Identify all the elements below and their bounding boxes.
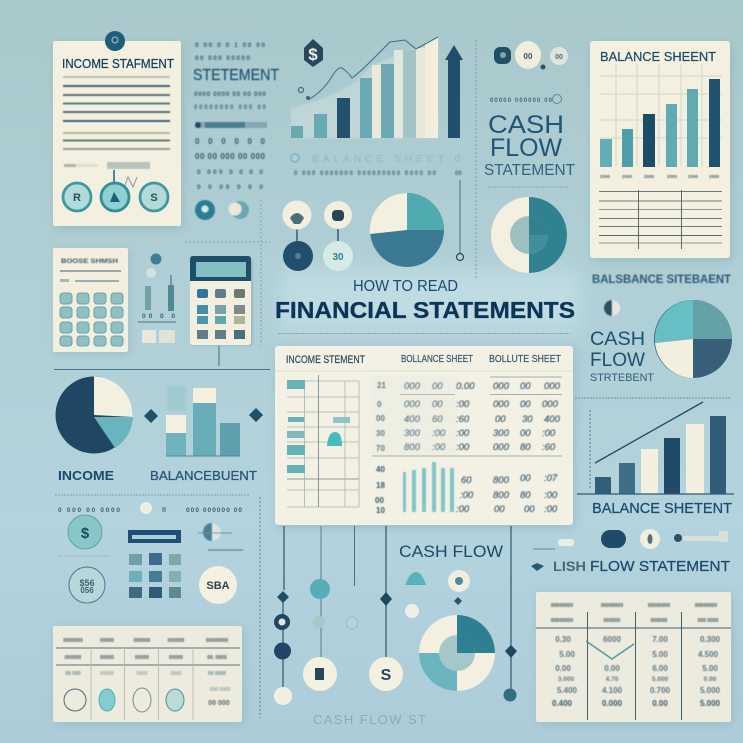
divider: dotted lines left [54,200,270,370]
numbers grid: :07 [544,473,558,484]
heading: cash flow statement lower [531,558,730,575]
labels: income and balance: INCOME [58,468,114,483]
numbers grid: 00 [432,399,443,410]
title [275,278,575,323]
table text: 00000 [100,638,114,644]
table text: 00. 0000 [207,655,227,661]
heading: cash flow statement: 00000 000000 00 [490,98,553,104]
table text: 00 000 [65,671,81,677]
icons: top cash flow badges: 00 [555,54,563,61]
panel: bottom right table: 00000000 [648,603,670,609]
table text: 00000 [169,655,183,661]
bar labels: 2000 [667,174,678,179]
icon: dollar sign: $ [308,45,318,64]
bars [600,79,720,167]
table text: 000000 [65,655,82,661]
heading: cash flow statement right [590,328,654,384]
numbers grid: :00 [432,442,446,453]
icon: gauge blur [198,523,243,550]
numbers grid: 30 [522,414,533,425]
left numbers column: 0 [377,400,382,409]
numbers grid: 00 [520,399,531,410]
icon: SBA badge: SBA [206,580,230,592]
icon: small badge [604,300,620,316]
connector stems with nodes [274,526,517,705]
panel: balance sheet with bars: BALANCE SHEENT [600,50,716,64]
numbers grid: 00 [524,504,535,515]
chart: left pie [56,376,133,454]
icon: SBA badge [199,566,237,604]
icons: connected circle nodes [282,200,353,271]
numbers grid: 400 [404,414,421,425]
arrow up [445,45,463,138]
oval icons [64,688,184,712]
numbers grid: 000 [493,381,510,392]
text: faded balance sheet caption [291,154,462,177]
text: faded balance sheet caption: 00 [455,171,462,177]
chart: right rising bars [575,398,734,494]
small calculator keypad card: BOOSE SHMSH [61,258,118,265]
keypad buttons [60,293,123,346]
heading: cash flow statement right: FLOW [590,349,646,371]
trend line [308,37,438,100]
numbers grid: :00 [542,428,556,439]
table numbers: 6.00 [652,664,668,673]
ledger table [599,190,722,249]
background glow behind title [280,270,580,330]
numbers grid: :00 [544,490,558,501]
text block: statement column: 00 00 000 00 000 [195,152,266,161]
panel: bottom right table: 00000000 [601,603,623,609]
icons: top cash flow badges: 00 [524,52,533,61]
numbers grid: 400 [544,414,561,425]
panel: bottom right table: 000000 [604,618,621,624]
numbers grid: 000 [404,381,421,392]
table text: 00000 [100,655,114,661]
table numbers: 0.000 [602,699,623,708]
heading: cash flow statement right: STRTEBENT [590,372,654,384]
numbers grid: 00 [494,504,505,515]
left numbers column: 18 [376,481,385,490]
numbers grid: 800 [493,490,510,501]
table numbers [552,635,721,708]
table text: 0000000 [63,638,83,644]
bar labels: 2000 [688,174,699,179]
numbers grid: 000 [404,399,421,410]
bar labels: 2000 [600,174,611,179]
divider: dotted vertical upper [475,40,477,278]
table text: 000 0000 [210,687,231,693]
table headers: BOLLUTE SHEET [489,353,561,365]
grid [287,375,359,507]
text block: statement column: 00 000 00000 [195,55,250,62]
bar labels: 2000 [644,174,655,179]
table headers: INCOME STEMENT [286,354,365,366]
table numbers: 0.00 [704,676,717,683]
labels: income and balance [58,468,257,483]
table text: 00000000 [206,638,228,644]
panel: bottom right table: 00000000 [551,618,573,624]
text block: statement column: 00000000 000 00 [194,105,267,111]
numbers grid: 00 [520,473,531,484]
bar labels: 2000 [622,174,633,179]
icon: calculator display and keys [128,530,181,598]
heading: cash flow statement: FLOW [490,134,562,162]
text block: statement column: 0 00 0 0 1 00 00 [195,42,265,49]
table numbers: 0.00 [555,664,571,673]
title: FINANCIAL STATEMENTS [275,297,575,323]
icon: mini bars between cards [138,254,176,343]
table numbers: 5.400 [557,686,578,695]
table numbers: 5.000 [700,699,721,708]
table numbers: 5.000 [700,686,721,695]
icons: small cash flow markers [405,570,470,618]
left numbers column: 10 [376,506,385,515]
table text: 00000 [135,655,149,661]
table numbers: 3.000 [558,676,575,683]
text block: statement column: 0 000 0 0 0 0 [197,169,263,176]
panel: income statement document [53,31,183,229]
numbers grid: 80 [520,442,531,453]
panel: income statement document: INCOME STAFMENT [62,57,174,71]
panel: bottom right table: 00000000 [551,603,573,609]
numbers grid: 000 [493,399,510,410]
icon: three circular badges: S [150,192,158,204]
numbers grid: 00 [432,381,443,392]
table numbers: 0.00 [652,699,668,708]
table rules [372,377,562,456]
table numbers: 4.500 [698,650,719,659]
numbers grid: 000 [493,442,510,453]
text: faded balance sheet caption: 0 000 0000000 000000000 0000 00 [294,171,437,177]
numbers grid: 000 [542,399,559,410]
decorative line with node [456,180,464,260]
numbers grid: :00 [456,428,470,439]
chart: small bar chart [166,386,240,456]
panel: balance sheet with bars [590,41,732,261]
chart: center pie [370,193,444,267]
icon: dollar circle: $ [81,525,90,542]
cluster: payment icons and keypad: 0 000 00 0000 [58,507,120,514]
left numbers column: 70 [376,444,385,453]
left numbers column: 21 [377,381,386,390]
icon: outlined coin: $56 [79,578,95,588]
heading: cash flow statement lower: FLOW STATEMENT [590,558,730,575]
text block: statement column: 0 0 00 0 0 0 [197,184,263,191]
numbers grid: 00 [520,428,531,439]
icon: outlined coin [69,567,105,603]
table numbers: 6000 [603,635,621,644]
numbers grid: 00 [495,414,506,425]
panel: bottom right table: 000000 [651,618,668,624]
icons: connected circle nodes: 30 [332,252,344,263]
icon: dollar sign [304,39,323,67]
heading: cash flow statement lower: LISH [553,558,586,574]
heading: cash flow statement right: CASH [590,328,645,350]
panel: bottom right table: 00000000 [695,603,717,609]
text block: statement column: 0 0 0 0 0 0 [195,137,266,146]
numbers grid: 800 [493,475,510,486]
labels: income and balance: BALANCEBUENT [150,468,257,483]
heading: balance statement caption: BALSBANCE SITEBAENT [592,274,731,286]
heading: cash flow statement: STATEMENT [484,162,576,179]
numbers grid: 300 [404,428,421,439]
numbers grid: 00 [520,381,531,392]
numbers grid: 800 [404,442,421,453]
panel: bottom right table: 000 0000 [698,618,719,624]
left numbers column [375,381,386,515]
numbers grid: :60 [456,414,470,425]
table numbers: 5.00 [559,650,575,659]
text block: statement column [193,42,279,220]
icons: row of controls [533,529,728,549]
chart: rising bars with trend line and arrow [291,37,463,138]
table numbers: 0.00 [604,664,620,673]
left numbers column: 00 [376,414,385,423]
mini bars [403,462,454,512]
left numbers column: 30 [376,429,385,438]
table numbers: 0.300 [700,635,721,644]
table text: 0000 [170,671,182,677]
bar labels [600,174,720,179]
text: faded cash flow footer: CASH FLOW ST [313,712,426,727]
icon: three circular badges [63,183,168,211]
table numbers: 7.00 [652,635,668,644]
heading: cash flow: CASH FLOW [399,542,503,561]
table numbers: 5.00 [652,650,668,659]
text block: statement column: 0000 0000 00 00 000 [194,91,266,98]
numbers grid: 0.00 [456,381,475,392]
cluster: payment icons and keypad: 000 000000 00 [186,507,242,514]
icon: outlined coin: 056 [80,586,94,595]
numbers grid: :00 [544,504,558,515]
icon: three circular badges: R [73,192,81,204]
numbers grid: :60 [542,442,556,453]
icon: mini bars between cards: 00 0 0 [142,313,175,320]
panel: main statement table [275,346,575,528]
table headers: BOLLANCE SHEET [401,353,473,365]
table numbers: 0.30 [555,635,571,644]
icon: calculator [190,256,253,346]
left numbers column: 40 [376,465,385,474]
numbers grid [404,381,561,515]
numbers grid: :00 [456,504,470,515]
heading: cash flow statement: CASH [488,111,564,139]
icon: dollar circle [68,515,102,549]
heading: balance sheet right: BALANCE SHETENT [592,500,732,517]
text: faded balance sheet caption: BALANCE SHEET 0 [312,154,460,165]
left numbers column: 00 [375,496,384,505]
numbers grid: 000 [544,381,561,392]
chart: right pie [654,300,732,378]
table text: 00 0000 [208,671,226,677]
panel: bottom left table [53,626,244,724]
table text: 000000 [134,638,151,644]
table numbers: 5.000 [652,676,669,683]
numbers grid: 300 [493,428,510,439]
table numbers: 0.700 [650,686,671,695]
numbers grid: :00 [456,442,470,453]
icon: diamond connectors [144,408,263,423]
table text [63,638,231,707]
table numbers: 5.00 [702,664,718,673]
numbers grid: :00 [456,399,470,410]
table text: 000000 [168,638,185,644]
numbers grid: :00 [460,490,474,501]
table text: 00 000 [208,700,230,707]
title: HOW TO READ [353,278,458,295]
table numbers: 0.400 [552,699,573,708]
connector stems with nodes: S [381,667,392,684]
table text: 00000 [100,671,114,677]
numbers grid: 60 [461,475,472,486]
bar labels: 2000 [709,174,720,179]
numbers grid: :00 [432,428,446,439]
table numbers: 4.100 [602,686,623,695]
chart: upper donut [491,197,567,273]
heading: cash flow statement [484,94,576,179]
text block: statement column: STETEMENT [193,67,279,84]
numbers grid: 80 [520,490,531,501]
small calculator keypad card [53,248,129,354]
panel: bottom right table [536,592,733,724]
node diamonds and circles [277,591,289,603]
icons: top cash flow badges [494,41,568,70]
table numbers: 4.70 [606,676,619,683]
teal cells [287,380,350,473]
table text: 0000 [136,671,148,677]
cluster: payment icons and keypad [58,502,243,604]
table headers [286,353,561,366]
chart: lower donut [419,615,495,691]
numbers grid: 60 [432,414,443,425]
